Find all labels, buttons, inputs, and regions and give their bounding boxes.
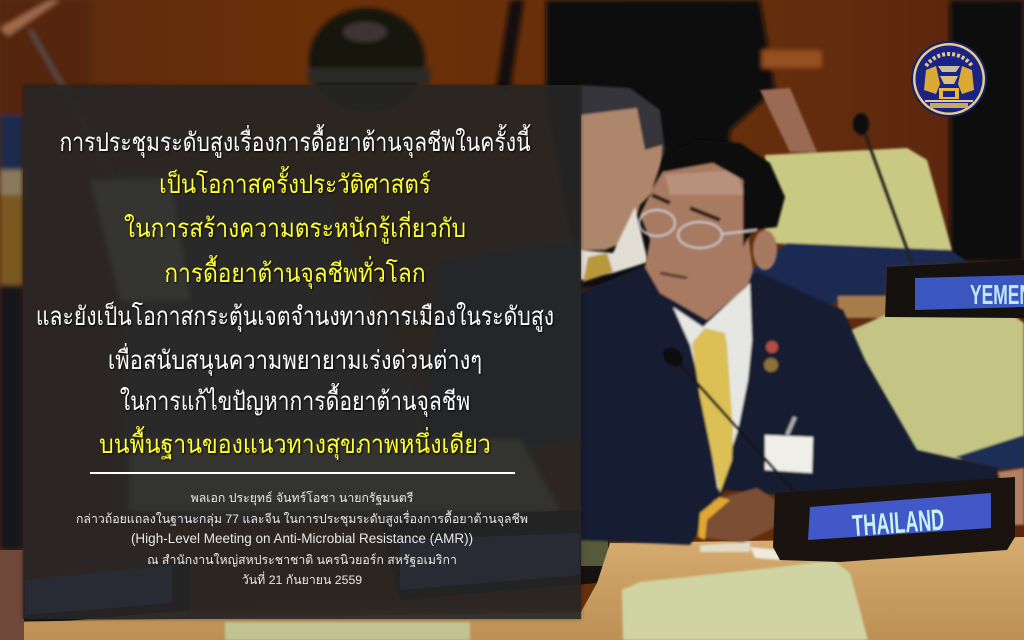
nameplate: Yemen [885, 260, 1024, 318]
attribution: meeting name: (High-Level Meeting on Anti-Microbial Resistance (AMR)) [131, 531, 473, 546]
attribution: date: วันที่ 21 กันยายน 2559 [242, 573, 362, 587]
panel: quotation overlay [23, 85, 581, 619]
quote line 3 highlight: ในการสร้างความตระหนักรู้เกี่ยวกับ [124, 215, 466, 243]
prime minister [580, 113, 1024, 560]
attribution: venue: ณ สำนักงานใหญ่สหประชาชาติ นครนิวยอร์ก สหรัฐอเมริกา [147, 553, 457, 567]
table [0, 537, 1024, 640]
attribution: speaker name: พลเอก ประยุทธ์ จันทร์โอชา นายกรัฐมนตรี [191, 491, 413, 505]
quote line 5: และยังเป็นโอกาสกระตุ้นเจตจำนงทางการเมืองในระดับสูง [36, 303, 554, 331]
nameplates behind panel [20, 508, 610, 625]
quote line 7: ในการแก้ไขปัญหาการดื้อยาต้านจุลชีพ [120, 388, 470, 416]
quote line 2 highlight: เป็นโอกาสครั้งประวัติศาสตร์ [159, 171, 431, 199]
chair backs [225, 88, 1024, 640]
quote line 1: การประชุมระดับสูงเรื่องการดื้อยาต้านจุลชีพในครั้งนี้ [59, 129, 531, 157]
hand at lower-left edge [0, 550, 24, 640]
quote line 6: เพื่อสนับสนุนความพยายามเร่งด่วนต่างๆ [108, 347, 482, 375]
attribution: occasion: กล่าวถ้อยแถลงในฐานะกลุ่ม 77 และจีน ในการประชุมระดับสูงเรื่องการดื้อยาต้านจุลชีพ [76, 512, 528, 526]
nameplate: Thailand [773, 477, 1015, 562]
emblem: Royal Thai Government seal [911, 41, 987, 117]
nameplate: Thailand: THAILAND [851, 504, 945, 543]
quote line 4 highlight: การดื้อยาต้านจุลชีพทั่วโลก [164, 260, 426, 288]
man beside the prime minister [580, 85, 665, 282]
quote line 8 highlight: บนพื้นฐานของแนวทางสุขภาพหนึ่งเดียว [99, 431, 491, 459]
